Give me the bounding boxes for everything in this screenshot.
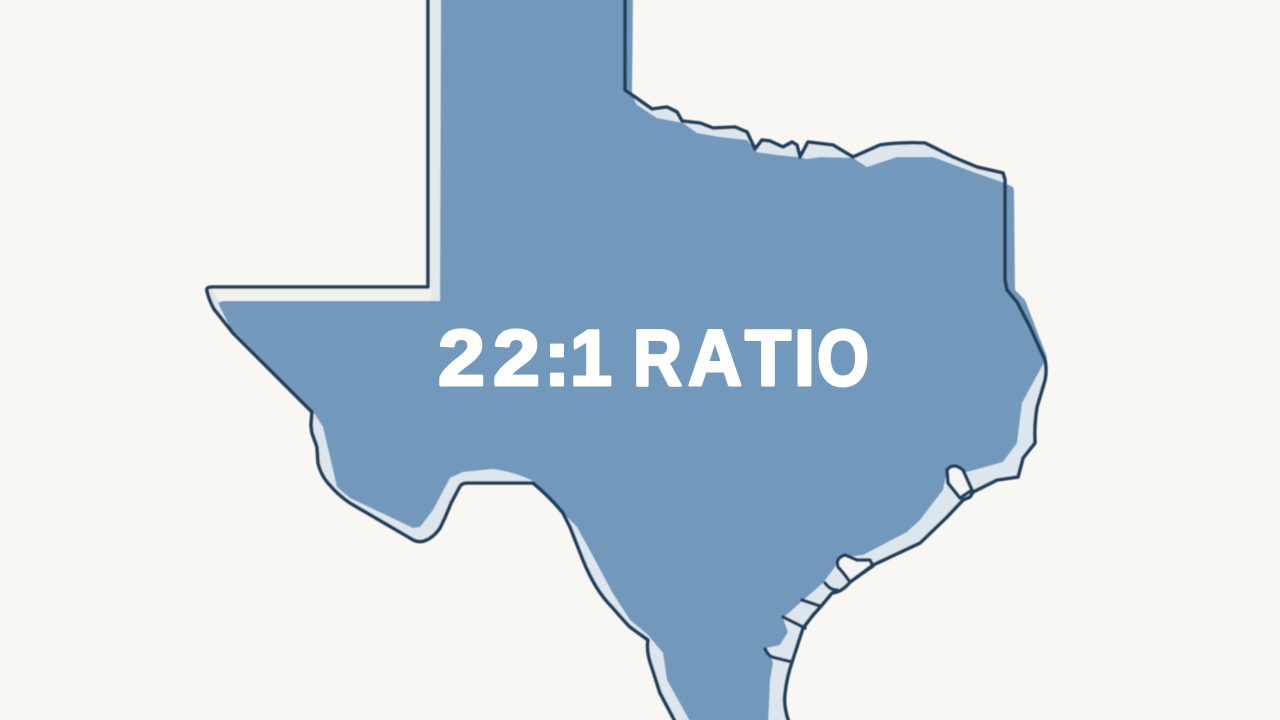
light band inside the outline xyxy=(207,0,1046,720)
map: Texas xyxy=(207,0,1047,720)
state outline xyxy=(207,0,1046,720)
ratio label: 2 xyxy=(493,313,540,402)
coastal barrier island ticks xyxy=(765,583,837,662)
pale strip beside the panhandle xyxy=(431,0,441,301)
ratio label: O xyxy=(817,313,869,402)
ratio label: : xyxy=(544,313,570,402)
ratio label: I xyxy=(794,313,815,402)
ratio label: 1 xyxy=(570,313,612,402)
state fill xyxy=(218,0,1047,720)
ratio label: 2 xyxy=(438,313,485,402)
ratio label: A xyxy=(688,313,742,402)
ratio label: T xyxy=(745,313,791,402)
bay: Galveston xyxy=(947,466,972,498)
ratio label: R xyxy=(633,313,682,402)
bay: Matagorda xyxy=(837,555,873,582)
pale band under the panhandle xyxy=(212,0,440,301)
